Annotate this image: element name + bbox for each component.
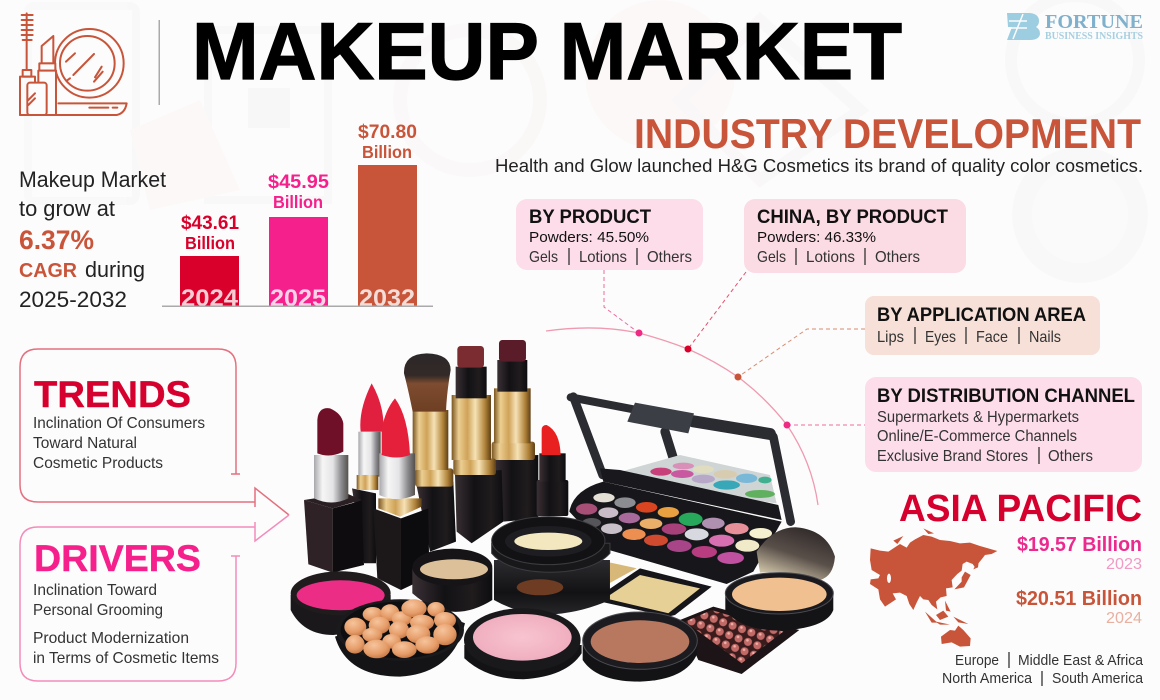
panel: drivers [20,527,255,681]
panel: by distribution channel [865,377,1142,472]
panel: by application area: Lips [877,329,904,346]
lipstick: dark cap 6 [492,340,538,522]
text: CAGR statement: 2025-2032 [19,287,127,312]
text: CAGR statement: to grow at [19,196,115,221]
bar 2025: 2025 [270,285,326,312]
faint background collage [28,0,1148,283]
bronze compact [583,643,697,682]
text: trends detail: Inclination Of Consumers [33,415,205,432]
panel: by product: BY PRODUCT [529,206,651,228]
text: CAGR statement: 6.37% [19,225,94,255]
lipstick: small red [537,425,568,516]
text: other regions [942,652,1144,687]
bar 2025: $45.95 [268,172,329,193]
panel: by product: Powders: 45.50% [529,229,649,246]
foundation compact [725,595,833,631]
jar [492,517,610,614]
text: trends detail: Toward Natural [33,435,137,452]
pink compact [291,571,391,635]
panel: by application area: BY APPLICATION AREA [877,304,1086,326]
panel: by application area: Face [976,329,1008,346]
bowl of powder pearls [335,599,465,677]
text: trends detail [33,415,205,472]
stat: 2024 value [1016,588,1142,627]
panel: trends [20,349,255,502]
blush compact [464,608,582,679]
lipstick: maroon [304,408,364,573]
panel: by distribution channel: BY DISTRIBUTION CHANNEL [877,385,1135,407]
panel: by application area: Eyes [925,329,956,346]
brush [757,527,835,580]
lipstick: back red [352,383,384,563]
logo: Fortune Business Insights: BUSINESS INSIGHTS [1045,31,1143,42]
panel: China by product: Gels [757,249,786,266]
panel: by application area: Nails [1029,329,1061,346]
bar 2032: Billion [362,142,412,162]
text: other regions: Europe [955,652,999,669]
bar 2024: Billion [185,233,235,253]
lipstick: dark cap 5 [452,346,503,543]
stat: 2024 value: $20.51 Billion [1016,588,1142,610]
arc with connectors [546,270,865,505]
panel: China by product [744,199,966,273]
text: drivers detail: Inclination Toward [33,582,157,599]
text: drivers detail: Personal Grooming [33,602,163,619]
bar 2024: 2024 [181,285,239,312]
panel: China by product: Lotions [806,249,855,266]
stat: 2024 value: 2024 [1106,610,1142,627]
title: MAKEUP MARKET [192,7,902,97]
text: trends detail: Cosmetic Products [33,455,163,472]
text: CAGR statement: Makeup Market [19,167,166,192]
text: other regions: Middle East & Africa [1018,652,1144,669]
lipstick: red front [373,398,429,590]
heading: trends: TRENDS [34,374,191,415]
panel: by distribution channel: Online/E-Commerce Channels [877,428,1077,445]
text: other regions: South America [1052,670,1144,687]
text: drivers detail: in Terms of Cosmetic Items [33,650,219,667]
panel: China by product: CHINA, BY PRODUCT [757,206,948,228]
illustration: cosmetics products [291,340,835,682]
bar 2025 [268,172,329,312]
panel: by distribution channel: Exclusive Brand Stores [877,448,1028,465]
logo: Fortune Business Insights: FORTUNE [1045,11,1143,33]
bar 2025: Billion [273,192,323,212]
small pan [412,549,492,612]
panel: by product [516,199,703,270]
panel: by distribution channel: Others [1048,448,1093,465]
lipsticks, brush and pans [291,340,610,679]
text: other regions: North America [942,670,1033,687]
bar chart: market size [162,122,433,312]
heading: Asia Pacific: ASIA PACIFIC [899,488,1142,530]
map: Asia Pacific [870,528,997,647]
rose tray [680,607,799,674]
stat: 2023 value [1017,534,1142,573]
panel: by distribution channel: Supermarkets & Hypermarkets [877,409,1079,426]
bar 2024 [180,213,239,312]
bar 2032: $70.80 [358,122,417,143]
gold compacts [598,560,637,588]
logo: Fortune Business Insights [1007,11,1143,42]
panel: by application area [865,296,1100,355]
text: industry development note: Health and Glow launched H&G Cosmetics its brand of quality color cosmetics. [495,156,1143,176]
palette and right-hand compacts [569,397,835,682]
text: CAGR statement: during [85,257,145,282]
text: drivers detail: Product Modernization [33,630,189,647]
text: CAGR statement: CAGR [19,260,78,282]
stat: 2023 value: 2023 [1106,556,1142,573]
panel: China by product: Powders: 46.33% [757,229,876,246]
panel: by product: Lotions [579,249,627,266]
panel: by product: Others [647,249,692,266]
kabuki brush [404,353,456,552]
mirror frame [571,397,791,522]
arrow: trends and drivers to products [255,488,289,541]
icon: makeup line icon [20,13,127,115]
text: CAGR statement [19,167,166,312]
bar 2024: $43.61 [181,213,239,234]
heading: drivers: DRIVERS [34,538,201,579]
stat: 2023 value: $19.57 Billion [1017,534,1142,556]
divider [158,20,160,105]
panel: by product: Gels [529,249,558,266]
text: drivers detail [33,582,219,667]
panel: China by product: Others [875,249,920,266]
bar 2032: 2032 [359,285,415,312]
bar 2032 [358,122,417,312]
